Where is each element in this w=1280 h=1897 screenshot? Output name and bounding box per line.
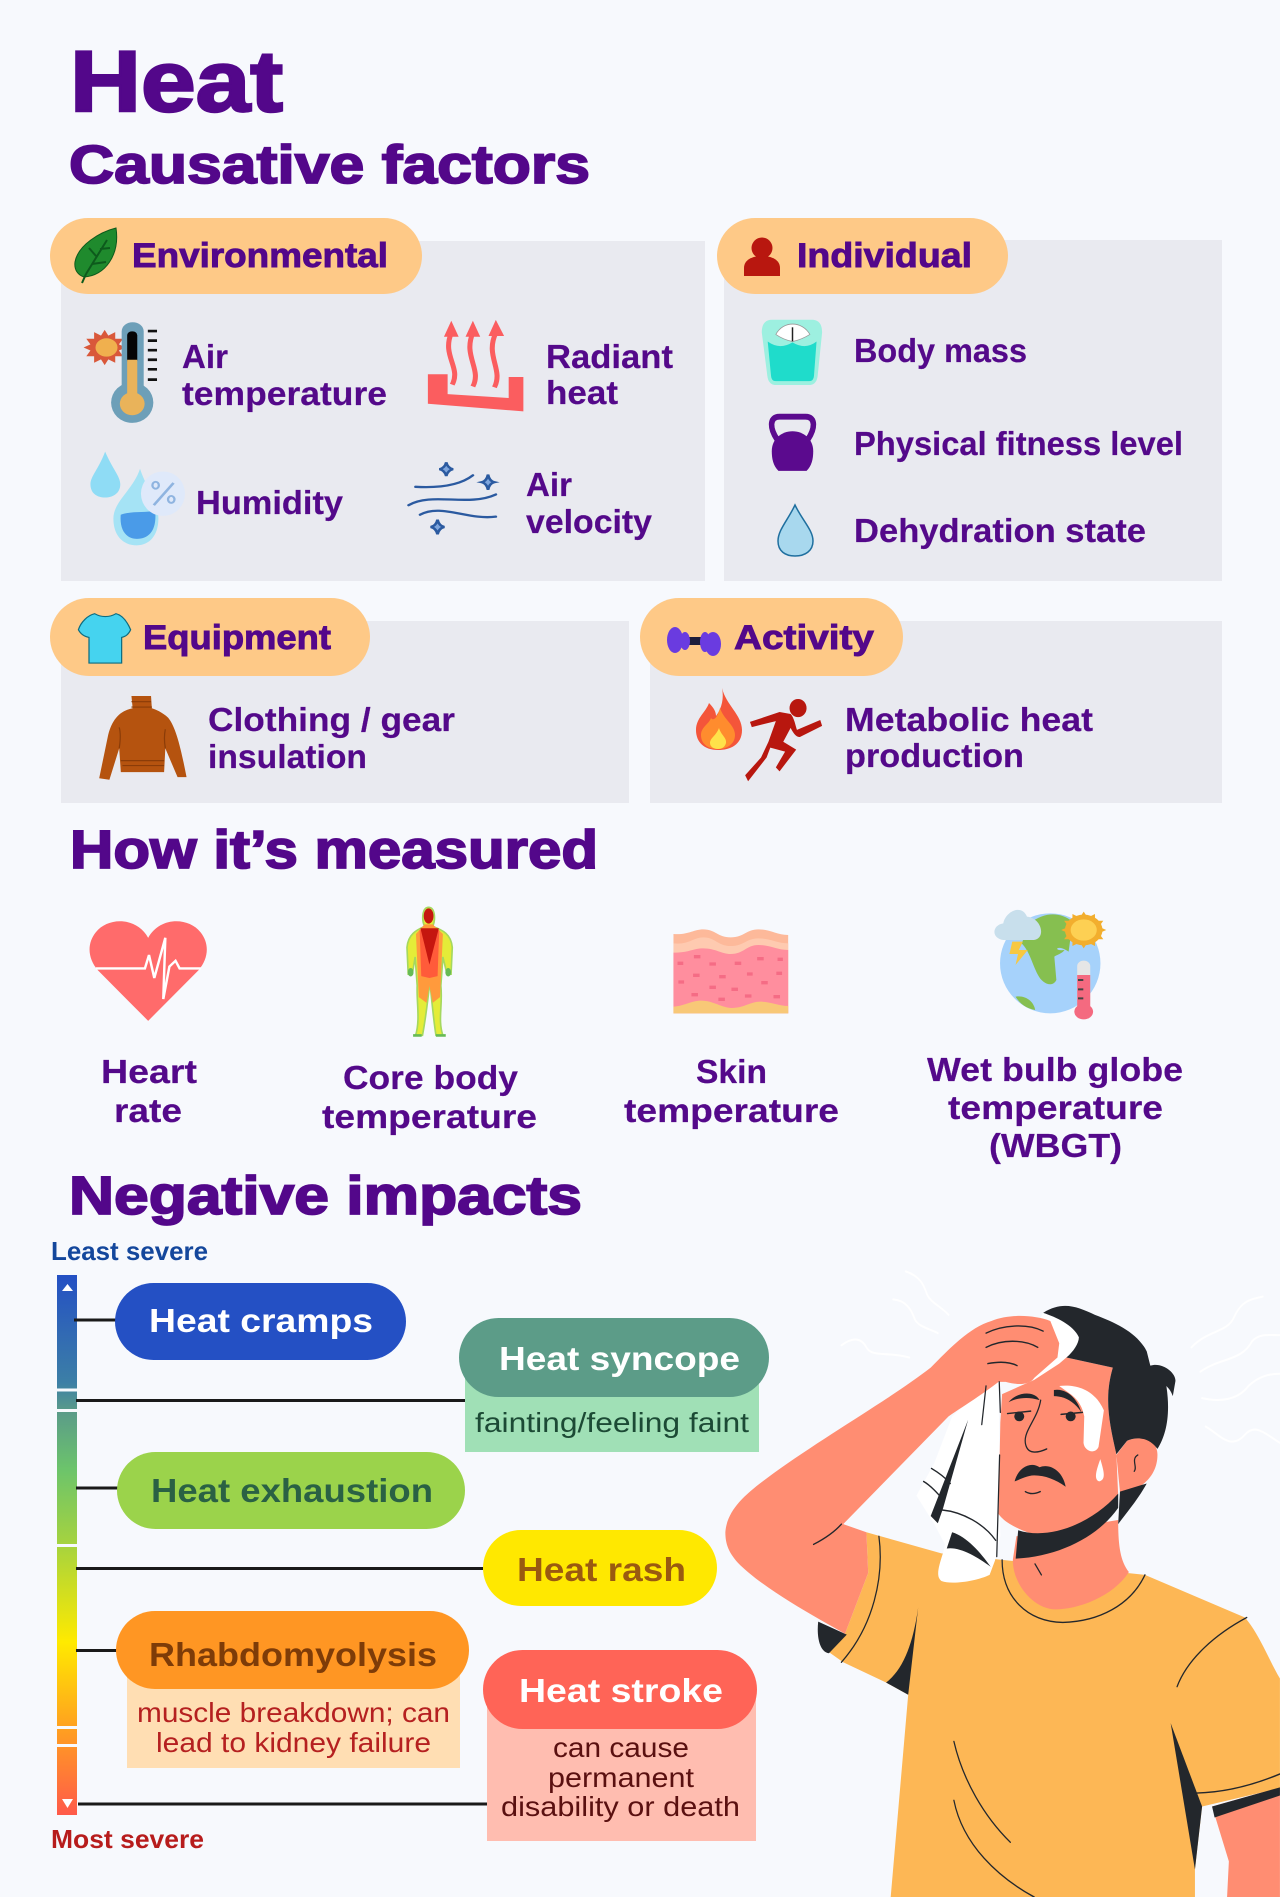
label: clothing / gear insulation: Clothing / gear [208, 701, 455, 738]
severity scale bar [57, 1275, 77, 1815]
measure: wet bulb globe temperature [927, 910, 1183, 1164]
label: body mass: Body mass [854, 332, 1027, 369]
label: metabolic heat production: production [845, 737, 1024, 774]
label: skin temperature: temperature [624, 1092, 839, 1129]
label: metabolic heat production: Metabolic heat [845, 701, 1093, 738]
icon: t-shirt [78, 614, 131, 663]
impact: heat stroke: Heat stroke [519, 1672, 723, 1709]
label: air temperature: temperature [182, 375, 387, 412]
impact: heat rash: Heat rash [517, 1551, 686, 1588]
impact: heat stroke: can cause [553, 1732, 689, 1763]
impact: heat stroke: disability or death [501, 1791, 740, 1822]
label: air velocity: velocity [526, 503, 653, 540]
label: heart rate: Heart [101, 1053, 197, 1090]
impact: heat rash [483, 1530, 717, 1606]
heading: how it's measured: How it’s measured [70, 820, 598, 880]
icon: water drop [778, 505, 813, 556]
impact: rhabdomyolysis: muscle breakdown; can [137, 1697, 450, 1728]
heading: individual: Individual [797, 237, 972, 275]
label: core body temperature: temperature [322, 1098, 537, 1135]
heading: equipment: Equipment [143, 619, 331, 657]
label: wet bulb globe temperature (WBGT): temperature [948, 1089, 1163, 1126]
impact: heat cramps: Heat cramps [149, 1302, 373, 1339]
facial features [1009, 1390, 1081, 1487]
label: air velocity [526, 466, 653, 540]
panel: activity [640, 598, 1222, 803]
label: dehydration state: Dehydration state [854, 512, 1146, 549]
icon: globe with weather [994, 910, 1106, 1019]
icon: kettlebell [772, 417, 813, 471]
icon: radiant heat [428, 320, 523, 411]
towel forehead [1016, 1313, 1079, 1382]
panel: equipment [50, 598, 629, 803]
dark shirt shadows [818, 1607, 1280, 1869]
label: heart rate [101, 1053, 197, 1129]
label: radiant heat: heat [546, 374, 618, 411]
icon: leaf [75, 228, 117, 283]
icon: humidity [90, 452, 185, 545]
title: Heat [70, 34, 283, 130]
icon: body heat map [407, 907, 452, 1035]
sweat [1059, 1386, 1104, 1481]
heat waves [841, 1271, 1280, 1443]
label: most severe: Most severe [51, 1824, 204, 1854]
label: wet bulb globe temperature (WBGT): Wet bulb globe [927, 1051, 1183, 1088]
arm and hand [725, 1316, 1059, 1634]
label: core body temperature [322, 1059, 537, 1135]
impact: heat cramps [115, 1283, 406, 1360]
heading: causative factors: Causative factors [69, 135, 590, 195]
icon: air temperature [84, 322, 157, 423]
icon: air velocity [409, 462, 496, 534]
heading: activity: Activity [734, 619, 874, 657]
label: physical fitness level: Physical fitness level [854, 425, 1183, 462]
illustration: sweating man [725, 1271, 1280, 1897]
label: core body temperature: Core body [343, 1059, 519, 1096]
impact: heat syncope: Heat syncope [499, 1340, 740, 1377]
label: humidity: Humidity [196, 484, 344, 521]
label: least severe: Least severe [51, 1236, 208, 1266]
impact: heat syncope [459, 1318, 769, 1452]
label: skin temperature [624, 1053, 839, 1129]
measure: skin temperature [624, 929, 839, 1129]
icon: dumbbell [667, 627, 721, 656]
icon: scale [762, 320, 822, 385]
face [999, 1358, 1118, 1536]
shirt [829, 1532, 1280, 1897]
heading: environmental: Environmental [132, 237, 388, 275]
impact: heat exhaustion [117, 1452, 465, 1529]
label: wet bulb globe temperature (WBGT): (WBGT) [989, 1127, 1122, 1164]
hair and beard shadow [1016, 1306, 1175, 1559]
label: metabolic heat production [845, 701, 1093, 774]
impact: heat exhaustion: Heat exhaustion [151, 1472, 433, 1509]
ear [1116, 1438, 1157, 1492]
icon: sweater [99, 696, 187, 780]
label: air temperature [182, 338, 387, 412]
label: radiant heat: Radiant [546, 338, 673, 375]
label: heart rate: rate [114, 1092, 182, 1129]
right arm [1212, 1787, 1280, 1897]
impact: heat syncope: fainting/feeling faint [475, 1407, 749, 1438]
neck [1013, 1520, 1129, 1609]
label: skin temperature: Skin [696, 1053, 767, 1090]
connector lines [74, 1320, 488, 1804]
label: clothing / gear insulation: insulation [208, 738, 367, 775]
label: wet bulb globe temperature (WBGT) [927, 1051, 1183, 1164]
shirt lines [841, 1536, 1280, 1897]
panel: individual [717, 218, 1222, 581]
measure: core body temperature [322, 907, 537, 1135]
icon: flame [696, 688, 742, 750]
icon: skin layers [673, 929, 788, 1013]
hand and towel lines [814, 1326, 1043, 1557]
label: clothing / gear insulation [208, 701, 455, 775]
icon: heart [90, 921, 207, 1021]
impact: rhabdomyolysis [116, 1611, 469, 1768]
impact: heat stroke: permanent [548, 1762, 694, 1793]
measure: heart rate [90, 921, 207, 1129]
icon: runner [745, 699, 822, 781]
impact: rhabdomyolysis: lead to kidney failure [156, 1727, 431, 1758]
heading: negative impacts: Negative impacts [69, 1166, 582, 1226]
label: air temperature: Air [182, 338, 228, 375]
icon: person [744, 238, 780, 276]
towel (hanging) [916, 1382, 1000, 1583]
label: air velocity: Air [526, 466, 572, 503]
panel: environmental [50, 218, 705, 581]
impact: heat stroke [483, 1650, 757, 1841]
impact: rhabdomyolysis: Rhabdomyolysis [149, 1636, 437, 1673]
label: radiant heat [546, 338, 673, 411]
